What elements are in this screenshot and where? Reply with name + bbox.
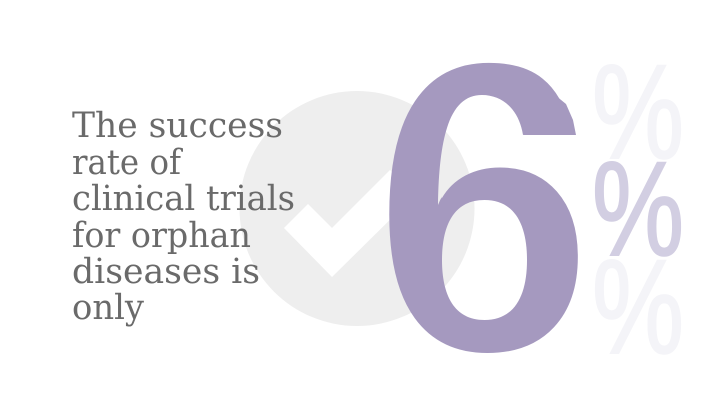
text block: success rate statement	[72, 106, 295, 328]
infographic canvas	[72, 62, 681, 354]
text block: success rate statement: diseases is	[72, 252, 260, 292]
percent sign: highlighted middle: %	[592, 135, 684, 284]
text block: success rate statement: for orphan	[72, 216, 251, 256]
text block: success rate statement: rate of	[72, 143, 184, 183]
big number 6	[389, 62, 578, 353]
icon: check mark in circle	[240, 91, 474, 326]
percent sign: faint top: %	[592, 38, 684, 187]
text block: success rate statement: clinical trials	[72, 179, 295, 219]
percent signs column	[592, 38, 684, 382]
percent sign: faint bottom: %	[592, 233, 684, 382]
text block: success rate statement: only	[72, 288, 144, 328]
text block: success rate statement: The success	[72, 106, 283, 146]
